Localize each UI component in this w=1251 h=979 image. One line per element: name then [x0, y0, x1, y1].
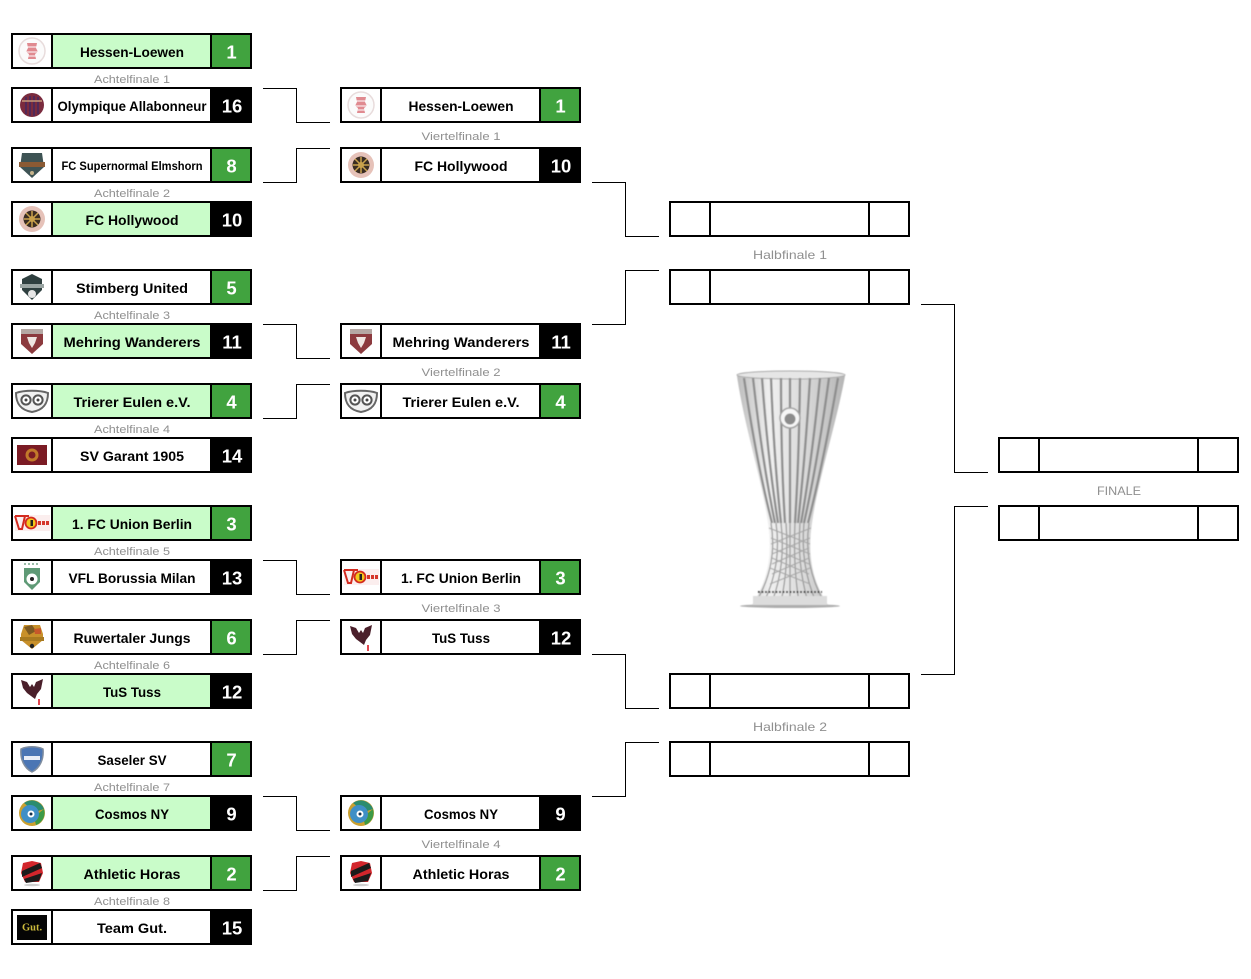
match row: FC Supernormal Elmshorn 8	[12, 148, 251, 182]
quarterfinal row: TuS Tuss 12: TuS Tuss	[432, 630, 490, 646]
label: Achtelfinale 4: Achtelfinale 4	[94, 424, 170, 436]
match row: Athletic Horas 2: 2	[226, 864, 237, 884]
match row: FC Supernormal Elmshorn 8: 8	[226, 156, 237, 176]
quarterfinal row: Hessen-Loewen 1: 1	[555, 96, 566, 116]
quarterfinal row: Mehring Wanderers 11: 11	[551, 332, 571, 352]
label: Viertelfinale 2: Viertelfinale 2	[422, 367, 500, 379]
label: Achtelfinale 7: Achtelfinale 7	[94, 782, 170, 794]
quarterfinal row: Athletic Horas 2	[341, 856, 580, 890]
icon: silver trophy	[737, 371, 845, 608]
match row: Team Gut. 15: Team Gut.	[97, 920, 167, 936]
match row: Olympique Allabonneur 16: 16	[222, 96, 242, 116]
quarterfinal row: TuS Tuss 12: 12	[551, 628, 571, 648]
match row: Hessen-Loewen 1: 1	[226, 42, 237, 62]
match row: Saseler SV 7	[12, 742, 251, 776]
label: Achtelfinale 6: Achtelfinale 6	[94, 660, 170, 672]
quarterfinal row: 1. FC Union Berlin 3: 3	[555, 568, 566, 588]
quarterfinal row: Mehring Wanderers 11	[341, 323, 581, 359]
match row: FC Supernormal Elmshorn 8: FC Supernormal Elmshorn	[62, 159, 202, 173]
match row: VFL Borussia Milan 13: 13	[222, 568, 242, 588]
match row: Saseler SV 7: 7	[226, 750, 237, 770]
label: Viertelfinale 3: Viertelfinale 3	[422, 603, 500, 615]
quarterfinal row: Athletic Horas 2: Athletic Horas	[412, 866, 510, 882]
quarterfinal row: 1. FC Union Berlin 3	[341, 560, 580, 594]
connector: Viertelfinale 1-2 to Halbfinale 1	[592, 182, 659, 324]
label: Achtelfinale 1: Achtelfinale 1	[94, 74, 170, 86]
quarterfinal row: Cosmos NY 9: Cosmos NY	[424, 806, 499, 822]
connector: Achtelfinale 3-4 to Viertelfinale 2	[263, 324, 330, 418]
quarterfinal row: Mehring Wanderers 11: Mehring Wanderers	[392, 334, 530, 350]
match row: Mehring Wanderers 11	[12, 323, 252, 359]
match row: Mehring Wanderers 11: 11	[222, 332, 242, 352]
match row: SV Garant 1905 14: SV Garant 1905	[80, 448, 184, 464]
connector: Achtelfinale 5-6 to Viertelfinale 3	[263, 560, 330, 654]
quarterfinal row: FC Hollywood 10: FC Hollywood	[414, 158, 508, 174]
quarterfinal row: FC Hollywood 10: 10	[551, 156, 571, 176]
quarterfinal row: Hessen-Loewen 1	[341, 88, 580, 122]
match row: Ruwertaler Jungs 6: Ruwertaler Jungs	[74, 630, 191, 646]
match row: Trierer Eulen e.V. 4: 4	[226, 392, 237, 412]
match row: Team Gut. 15: 15	[222, 918, 242, 938]
label: Halbfinale 1: Halbfinale 1	[753, 248, 827, 262]
match row: Cosmos NY 9: 9	[226, 804, 237, 824]
match row: 1. FC Union Berlin 3	[12, 506, 251, 540]
quarterfinal row: Cosmos NY 9: 9	[555, 804, 566, 824]
match row: Trierer Eulen e.V. 4: Trierer Eulen e.V.	[74, 394, 190, 410]
semifinal row: Halbfinale 2 bottom, empty	[670, 742, 909, 776]
quarterfinal row: Hessen-Loewen 1: Hessen-Loewen	[408, 98, 514, 114]
quarterfinal row: Athletic Horas 2: 2	[555, 864, 566, 884]
quarterfinal row: Trierer Eulen e.V. 4: 4	[555, 392, 566, 412]
match row: FC Hollywood 10: FC Hollywood	[86, 212, 178, 228]
match row: Ruwertaler Jungs 6	[12, 620, 251, 654]
quarterfinal row: Trierer Eulen e.V. 4	[341, 384, 580, 418]
semifinal row: Halbfinale 2 top, empty	[670, 674, 909, 708]
label: Viertelfinale 4: Viertelfinale 4	[422, 839, 500, 851]
match row: VFL Borussia Milan 13: VFL Borussia Milan	[68, 570, 196, 586]
connector: Viertelfinale 3-4 to Halbfinale 2	[592, 654, 659, 796]
match row: Mehring Wanderers 11: Mehring Wanderers	[64, 334, 201, 350]
match row: 1. FC Union Berlin 3: 3	[226, 514, 237, 534]
match row: Trierer Eulen e.V. 4	[12, 384, 251, 418]
quarterfinal row: 1. FC Union Berlin 3: 1. FC Union Berlin	[401, 570, 521, 586]
final row: top, empty	[999, 438, 1238, 472]
match row: VFL Borussia Milan 13	[12, 559, 252, 595]
quarterfinal row: Cosmos NY 9	[341, 795, 581, 831]
match row: TuS Tuss 12: TuS Tuss	[103, 684, 161, 700]
match row: Olympique Allabonneur 16	[12, 87, 252, 123]
connector: Achtelfinale 1-2 to Viertelfinale 1	[263, 88, 330, 182]
final row: bottom, empty	[999, 506, 1238, 540]
label: Achtelfinale 3: Achtelfinale 3	[94, 310, 170, 322]
match row: 1. FC Union Berlin 3: 1. FC Union Berlin	[72, 516, 192, 532]
match row: Saseler SV 7: Saseler SV	[98, 752, 167, 768]
match row: SV Garant 1905 14	[12, 437, 252, 473]
match row: Athletic Horas 2: Athletic Horas	[84, 866, 181, 882]
quarterfinal row: FC Hollywood 10	[341, 147, 581, 183]
quarterfinal row: TuS Tuss 12	[341, 619, 581, 655]
match row: SV Garant 1905 14: 14	[222, 446, 243, 466]
semifinal row: Halbfinale 1 bottom, empty	[670, 270, 909, 304]
match row: Hessen-Loewen 1	[12, 34, 251, 68]
match row: FC Hollywood 10: 10	[222, 210, 242, 230]
match row: TuS Tuss 12: 12	[222, 682, 242, 702]
match row: Stimberg United 5: 5	[226, 278, 237, 298]
label: FINALE: FINALE	[1097, 484, 1141, 498]
match row: Cosmos NY 9	[12, 795, 252, 831]
label: Halbfinale 2: Halbfinale 2	[753, 720, 827, 734]
label: Achtelfinale 8: Achtelfinale 8	[94, 896, 170, 908]
match row: Hessen-Loewen 1: Hessen-Loewen	[80, 44, 184, 60]
match row: Cosmos NY 9: Cosmos NY	[95, 806, 170, 822]
match row: Athletic Horas 2	[12, 856, 251, 890]
label: Achtelfinale 5: Achtelfinale 5	[94, 546, 170, 558]
label: Viertelfinale 1: Viertelfinale 1	[422, 131, 500, 143]
match row: FC Hollywood 10	[12, 201, 252, 237]
match row: Olympique Allabonneur 16: Olympique Allabonneur	[58, 98, 207, 114]
label: Achtelfinale 2: Achtelfinale 2	[94, 188, 170, 200]
match row: Stimberg United 5: Stimberg United	[76, 280, 188, 296]
connector: Achtelfinale 7-8 to Viertelfinale 4	[263, 796, 330, 890]
match row: TuS Tuss 12	[12, 673, 252, 709]
match row: Team Gut. 15	[12, 909, 252, 945]
connector: Halbfinale to Finale	[921, 304, 988, 674]
match row: Stimberg United 5	[12, 270, 251, 304]
semifinal row: Halbfinale 1 top, empty	[670, 202, 909, 236]
quarterfinal row: Trierer Eulen e.V. 4: Trierer Eulen e.V.	[402, 394, 520, 410]
match row: Ruwertaler Jungs 6: 6	[226, 628, 237, 648]
